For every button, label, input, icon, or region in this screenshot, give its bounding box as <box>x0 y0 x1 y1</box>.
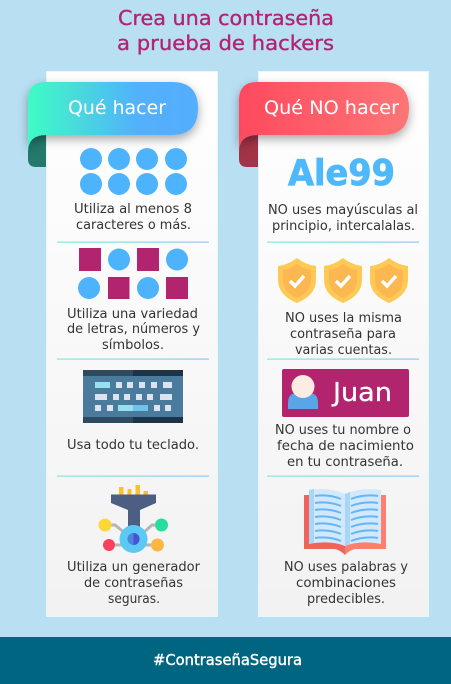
panel: qué no hacer <box>239 71 429 617</box>
text: mayúsculas: principio, intercalalas. <box>272 218 415 234</box>
banner: qué hacer: Qué hacer <box>68 97 166 119</box>
footer band: #ContraseñaSegura <box>153 651 302 669</box>
text: nombre o fecha: NO uses tu nombre o <box>275 422 411 438</box>
text: generador: Utiliza un generador <box>67 559 200 575</box>
icon: keyboard <box>83 370 183 423</box>
text: nombre o fecha <box>275 422 414 470</box>
text: misma contraseña: contraseña para <box>290 326 396 342</box>
title <box>117 6 334 55</box>
text: al menos 8 caracteres: Utiliza al menos 8 <box>74 201 192 217</box>
text: variedad de caracteres: de letras, números y <box>67 321 200 337</box>
text: generador: de contraseñas <box>84 575 183 591</box>
text: palabras predecibles: predecibles. <box>307 591 385 607</box>
text: usa todo tu teclado: Usa todo tu teclado. <box>67 437 199 453</box>
icon: eight circles <box>80 148 187 195</box>
icon: squares and circles <box>78 248 188 299</box>
text: al menos 8 caracteres: caracteres o más. <box>76 217 191 233</box>
icon: open book <box>304 489 386 555</box>
text: variedad de caracteres: símbolos. <box>102 337 164 353</box>
text: variedad de caracteres <box>67 306 200 353</box>
text: misma contraseña <box>285 310 402 358</box>
text: misma contraseña: NO uses la misma <box>285 310 402 326</box>
title: Crea una contraseña <box>118 6 334 30</box>
text: al menos 8 caracteres <box>74 201 192 233</box>
text: nombre o fecha: en tu contraseña. <box>287 454 403 470</box>
icon: Juan name card: Juan <box>331 378 392 408</box>
panel: qué hacer <box>28 71 218 617</box>
text: nombre o fecha: fecha de nacimiento <box>277 438 414 454</box>
text: variedad de caracteres: Utiliza una variedad <box>67 306 198 322</box>
banner: qué no hacer <box>239 82 409 167</box>
text: generador <box>67 559 200 607</box>
banner: qué hacer <box>28 82 198 167</box>
text: mayúsculas: NO uses mayúsculas al <box>268 202 418 218</box>
icon: password generator funnel <box>98 485 168 553</box>
title: a prueba de hackers <box>117 31 334 55</box>
footer band <box>0 637 451 684</box>
icon: Juan name card <box>282 369 409 417</box>
icon: Ale99: Ale99 <box>288 153 395 194</box>
text: palabras predecibles <box>284 559 408 607</box>
text: mayúsculas <box>268 202 418 234</box>
icon: three shields <box>278 258 408 303</box>
text: palabras predecibles: combinaciones <box>296 575 396 591</box>
text: generador: seguras. <box>108 591 160 607</box>
banner: qué no hacer: Qué NO hacer <box>264 97 399 119</box>
text: misma contraseña: varias cuentas. <box>295 342 392 358</box>
text: palabras predecibles: NO uses palabras y <box>284 559 408 575</box>
